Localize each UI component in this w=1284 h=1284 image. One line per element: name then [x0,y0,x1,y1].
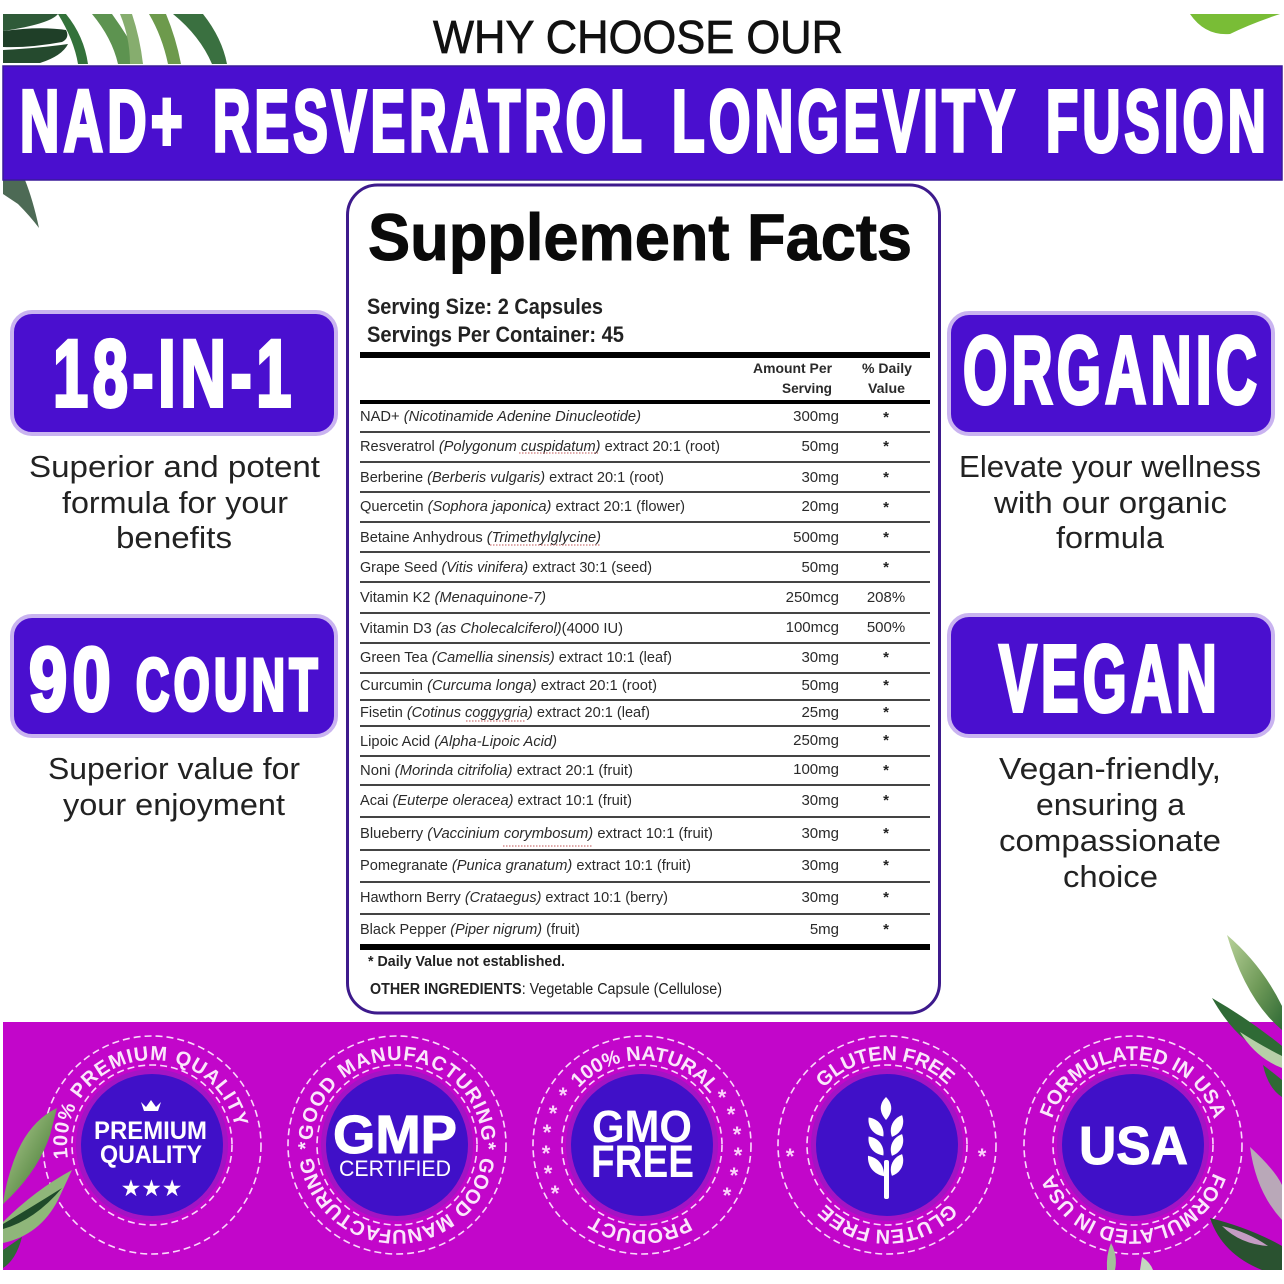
ingredient rows: * [883,529,889,546]
ingredient rows: Fisetin (Cotinus coggygria) extract 20:1 (leaf) [360,704,650,721]
table header: Value [868,380,905,396]
badge: gluten free: GLUTEN FREE [817,1046,956,1085]
badge: usa: USA [1079,1116,1188,1176]
badge: gmo free: * [718,1085,727,1110]
ingredient rows: 30mg [801,469,839,486]
text: vegan description: Vegan-friendly, [999,751,1221,786]
text: vegan description: ensuring a [1036,787,1186,822]
ingredient rows: Pomegranate (Punica granatum) extract 10:1 (fruit) [360,857,691,874]
text: 90 count description: your enjoyment [63,787,285,822]
ingredient rows: Lipoic Acid (Alpha-Lipoic Acid) [360,733,557,750]
badge: gmo free: * [727,1102,736,1127]
panel: supplement facts [348,185,940,1013]
ingredient rows: Berberine (Berberis vulgaris) extract 20:1 (root) [360,469,664,486]
ingredient rows: * [883,857,889,874]
icon: wheat [864,1097,907,1199]
badge: gmo free: FREE [591,1136,694,1187]
text: 18-in-1 description: benefits [116,520,232,555]
ingredient rows: Black Pepper (Piper nigrum) (fruit) [360,921,580,938]
serving information: Serving Size: 2 Capsules [367,294,603,319]
ingredient rows: Blueberry (Vaccinium corymbosum) extract 10:1 (fruit) [360,825,713,842]
badge: gmp certified: GOOD MANUFACTURING [300,1158,494,1244]
ingredient rows: * [883,438,889,455]
ingredient rows: 208% [867,589,905,606]
title banner: LONGEVITY [672,73,1019,170]
ingredient rows: * [883,825,889,842]
ingredient rows: * [883,921,889,938]
ingredient rows: Resveratrol (Polygonum cuspidatum) extract 20:1 (root) [360,438,720,455]
ingredient rows: Hawthorn Berry (Crataegus) extract 10:1 (berry) [360,889,668,906]
other ingredients: OTHER INGREDIENTS: Vegetable Capsule (Cellulose) [370,981,722,998]
badge: gmp certified: CERTIFIED [339,1156,451,1181]
ingredient rows: 300mg [793,408,839,425]
ingredient rows: 30mg [801,649,839,666]
ingredient rows: Betaine Anhydrous (Trimethylglycine) [360,529,601,546]
ingredient rows: 100mcg [786,619,839,636]
ingredient rows: 5mg [810,921,839,938]
badge: gmp certified: *GOOD MANUFACTURING* [298,1046,496,1150]
badge: gluten free [777,1035,997,1255]
badge: premium quality: ★★★ [122,1178,181,1200]
badge: gmo free: * [549,1101,558,1126]
badge: gmo free [532,1035,752,1255]
badge: usa: FORMULATED IN USA [1040,1046,1225,1119]
ingredient rows: 250mg [793,732,839,749]
panel: 90 count [12,616,336,736]
ingredient rows: 20mg [801,498,839,515]
ingredient rows: 50mg [801,677,839,694]
ingredient rows: 30mg [801,857,839,874]
icon: crown [141,1100,161,1111]
badge: gmp certified [287,1035,507,1255]
leaves: top left [3,14,227,64]
leaves: bottom left [3,1108,72,1268]
ingredient rows: * [883,762,889,779]
leaf: top right [1190,14,1280,34]
ingredient rows: Grape Seed (Vitis vinifera) extract 30:1 (seed) [360,559,652,576]
badge: gmo free: * [733,1122,742,1147]
ingredient rows: Curcumin (Curcuma longa) extract 20:1 (root) [360,677,657,694]
ingredient rows: * [883,409,889,426]
ingredient rows: 25mg [801,704,839,721]
ingredient rows: * [883,469,889,486]
ingredient rows: 30mg [801,889,839,906]
text: vegan description [999,751,1221,894]
badge: gmo free: 100% NATURAL [572,1046,716,1094]
title banner: RESVERATROL [213,73,646,170]
ingredient rows: 500mg [793,529,839,546]
panel: 18-in-1: 18-IN-1 [53,321,296,427]
ingredient rows: 30mg [801,825,839,842]
serving information: Servings Per Container: 45 [367,322,624,347]
text: 18-in-1 description: Superior and potent [29,449,320,484]
badge: gluten free: * [786,1144,795,1169]
text: 18-in-1 description: formula for your [62,485,288,520]
text: 18-in-1 description [29,449,320,555]
title banner [3,66,1282,180]
badge: gmo free: * [543,1120,552,1145]
badge: gmo free: PRODUCT [587,1218,692,1244]
ingredient rows: * [883,889,889,906]
title banner: NAD+ [20,73,187,170]
badge: usa: FORMULATED IN USA [1042,1174,1226,1244]
ingredient rows: Vitamin K2 (Menaquinone-7) [360,589,546,606]
badge: gmo free: * [542,1141,551,1166]
ingredient rows: NAD+ (Nicotinamide Adenine Dinucleotide) [360,408,641,425]
badge: gmo free: * [559,1083,568,1108]
heading: supplement facts: Supplement Facts [368,200,912,274]
badge: premium quality: 100% PREMIUM QUALITY [53,1046,248,1158]
ingredient rows: * [883,499,889,516]
badge: gmo free: * [544,1161,553,1186]
panel: 90 count: COUNT [136,645,322,726]
badge: gmo free: * [734,1143,743,1168]
badge: premium quality [42,1035,262,1255]
ingredient rows: Noni (Morinda citrifolia) extract 20:1 (fruit) [360,762,633,779]
ingredient rows: * [883,792,889,809]
panel: 18-in-1 [12,312,336,434]
badge: premium quality: PREMIUM [94,1117,207,1145]
table header [753,360,912,396]
text: organic description [959,449,1261,555]
text: organic description: Elevate your wellness [959,449,1261,484]
badge: gluten free: * [978,1144,987,1169]
badge: gmp certified: GMP [333,1105,457,1165]
text: vegan description: compassionate [999,823,1221,858]
table header: Amount Per [753,360,833,376]
ingredient rows: 100mg [793,761,839,778]
text: organic description: formula [1056,520,1165,555]
ingredient rows: * [883,732,889,749]
badge: gmo free: * [551,1181,560,1206]
ingredient rows: * [883,704,889,721]
text: organic description: with our organic [993,485,1227,520]
badge: gmo free: * [723,1183,732,1208]
leaf: under banner [3,180,39,228]
text: 90 count description: Superior value for [48,751,300,786]
table header: Serving [782,380,832,396]
ingredient rows [360,408,905,938]
serving information [367,294,624,347]
ingredient rows: 50mg [801,559,839,576]
badge: gmo free: * [730,1163,739,1188]
ingredient rows: 250mcg [786,589,839,606]
ingredient rows: Vitamin D3 (as Cholecalciferol)(4000 IU) [360,620,623,637]
heading: why choose our: WHY CHOOSE OUR [433,11,843,63]
table header: % Daily [862,360,912,376]
ingredient rows: 30mg [801,792,839,809]
ingredient rows: * [883,559,889,576]
badge: gluten free: GLUTEN FREE [817,1204,956,1244]
footnote: * Daily Value not established. [368,953,565,970]
badge strip background [3,1022,1282,1270]
ingredient rows: Acai (Euterpe oleracea) extract 10:1 (fruit) [360,792,632,809]
leaves: bottom right [1107,935,1282,1270]
ingredient rows: * [883,677,889,694]
ingredient rows: * [883,649,889,666]
text: vegan description: choice [1063,859,1158,894]
ingredient rows: 50mg [801,438,839,455]
ingredient rows: Quercetin (Sophora japonica) extract 20:1 (flower) [360,498,685,515]
badge: premium quality: QUALITY [100,1141,202,1169]
ingredient rows: Green Tea (Camellia sinensis) extract 10:1 (leaf) [360,649,672,666]
ingredient rows: 500% [867,619,905,636]
text: 90 count description [48,751,300,822]
badge: gmo free: GMO [592,1101,692,1152]
panel: 90 count: 90 [29,630,116,730]
badge: usa [1023,1035,1243,1255]
